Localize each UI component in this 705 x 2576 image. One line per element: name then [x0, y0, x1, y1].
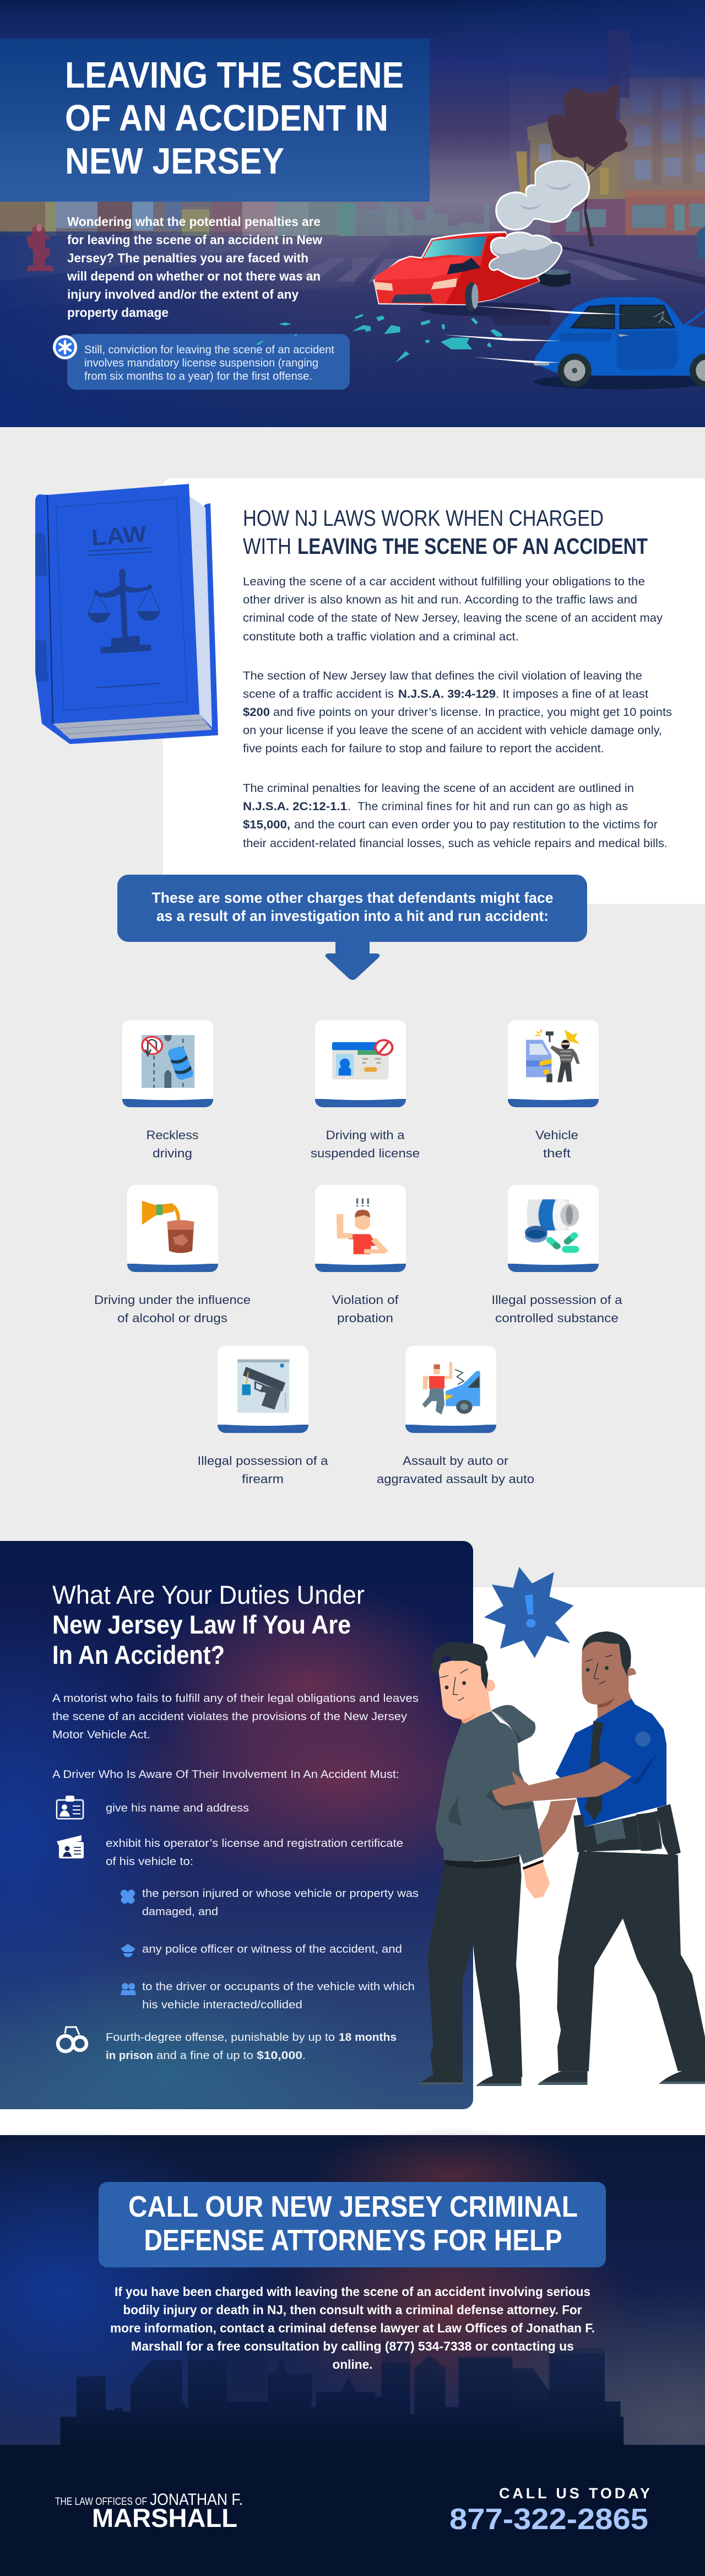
tree	[547, 84, 628, 246]
card: assault by auto	[405, 1346, 496, 1433]
blue car	[533, 297, 705, 390]
yellow building	[527, 120, 631, 199]
law office logo: THE LAW OFFICES OF	[55, 2496, 147, 2508]
street banner	[516, 152, 528, 195]
law paragraph 3: $15,000,	[243, 818, 290, 831]
sub duty: driver or occupants: his vehicle interacted/collided	[142, 1998, 302, 2011]
duties heading: New Jersey Law If You Are	[52, 1610, 351, 1639]
charge cards	[94, 1020, 622, 1486]
duty: exhibit license: exhibit his operator’s license and registration certificate	[106, 1837, 403, 1850]
duties intro: Motor Vehicle Act.	[52, 1728, 150, 1741]
charge labels: theft	[543, 1146, 571, 1160]
white law panel	[163, 478, 705, 904]
card: violation of probation	[315, 1185, 406, 1272]
crash vehicles	[256, 160, 705, 390]
offense penalty text: 18 months	[339, 2031, 397, 2044]
duties heading	[52, 1580, 365, 1669]
sub duty: driver or occupants: to the driver or occupants of the vehicle with which	[142, 1980, 415, 1993]
far skyline	[386, 203, 490, 235]
law paragraph 1	[243, 575, 663, 643]
top fade over buildings	[0, 13, 705, 153]
sidewalk	[550, 235, 705, 272]
icon: thief	[526, 1030, 580, 1082]
icon: pills	[525, 1199, 579, 1253]
charge labels: driving	[153, 1146, 192, 1160]
charge labels: Vehicle	[535, 1128, 578, 1142]
charge labels: Violation of	[332, 1293, 399, 1307]
law paragraph 1: criminal code of the state of New Jersey, leaving the scene of an accident may	[243, 612, 663, 624]
charge labels: controlled substance	[495, 1311, 619, 1325]
charge labels: Illegal possession of a	[491, 1293, 622, 1307]
city skyline	[60, 2325, 623, 2446]
sub duty: person injured	[142, 1887, 419, 1918]
duties subheading: A Driver Who Is Aware Of Their Involvement In An Accident Must:	[52, 1768, 399, 1781]
charge labels: Illegal possession of a	[197, 1454, 328, 1468]
law section heading: WITH	[243, 533, 291, 559]
offense penalty text: Fourth-degree offense, punishable by up to	[106, 2031, 335, 2044]
tall building	[620, 76, 705, 192]
left sidewalk	[0, 236, 346, 281]
charge labels: probation	[337, 1311, 393, 1325]
CTA paragraph: online.	[333, 2357, 372, 2372]
offense penalty text	[106, 2031, 397, 2062]
sub duty: person injured: damaged, and	[142, 1905, 218, 1918]
officer forearm	[492, 1761, 631, 1806]
offense penalty text: in prison	[106, 2049, 153, 2062]
icon: law book	[35, 484, 218, 744]
hero intro text	[67, 214, 322, 320]
officer	[538, 1631, 705, 2085]
hero section	[0, 0, 705, 427]
charge labels	[94, 1128, 622, 1486]
hero title: LEAVING THE SCENE	[65, 55, 404, 96]
CTA banner	[99, 2182, 606, 2267]
illustration: officer and suspect	[418, 1567, 705, 2086]
icon: license	[332, 1040, 392, 1080]
crosswalk stripes	[297, 258, 639, 282]
footer background	[0, 2127, 705, 2563]
charge labels: suspended license	[311, 1146, 420, 1160]
icon: law book: LAW	[90, 521, 148, 551]
law paragraph 2: N.J.S.A. 39:4-129	[398, 688, 496, 700]
charge labels: Driving under the influence	[94, 1293, 251, 1307]
hero intro text: injury involved and/or the extent of any	[67, 287, 299, 301]
bench	[696, 226, 705, 258]
call us today: CALL US TODAY	[499, 2485, 650, 2502]
sub duty: person injured: the person injured or whose vehicle or property was	[142, 1887, 419, 1900]
card: suspended license	[315, 1020, 406, 1107]
red car	[373, 231, 540, 311]
callout panel	[67, 334, 350, 390]
fire hydrant	[26, 224, 54, 271]
phone number: 877-322-2865	[449, 2503, 648, 2536]
alert burst	[484, 1567, 573, 1658]
glass shards	[256, 314, 502, 363]
card: controlled substance	[508, 1185, 599, 1272]
law paragraph 3: N.J.S.A. 2C:12-1.1	[243, 800, 347, 813]
top right sky tint	[529, 0, 705, 78]
law office logo: JONATHAN F.	[150, 2491, 243, 2509]
law paragraph 2: $200	[243, 706, 270, 719]
hero title	[65, 55, 404, 182]
duties dark panel	[0, 1541, 573, 2182]
offense penalty text: and a fine of up to	[156, 2049, 253, 2062]
duties intro: A motorist who fails to fulfill any of their legal obligations and leaves	[52, 1692, 419, 1705]
charge labels: aggravated assault by auto	[377, 1472, 534, 1486]
law paragraph 2: and five points on your driver’s license. In practice, you might get 10 points	[273, 706, 672, 719]
law paragraph 3: . The criminal fines for hit and run can go as high as	[348, 800, 628, 813]
banner: other charges: These are some other charges that defendants might face	[152, 890, 553, 906]
icon: license card	[57, 1835, 84, 1858]
law paragraph 1: constitute both a traffic violation and a criminal act.	[243, 630, 519, 643]
callout text: involves mandatory license suspension (ranging	[84, 357, 318, 369]
law paragraph 1: Leaving the scene of a car accident without fulfilling your obligations to the	[243, 575, 645, 588]
sub duty: driver or occupants	[142, 1980, 415, 2011]
card: driving under influence	[127, 1185, 218, 1272]
duties intro	[52, 1692, 419, 1741]
icon: person and car	[422, 1362, 480, 1414]
law paragraph 3: their accident-related financial losses, such as vehicle repairs and medical bills.	[243, 837, 668, 850]
hero title: OF AN ACCIDENT IN	[65, 98, 388, 139]
hero intro text: for leaving the scene of an accident in New	[67, 233, 322, 247]
callout text: from six months to a year) for the first offense.	[84, 370, 312, 382]
CTA paragraph: If you have been charged with leaving the scene of an accident involving serious	[115, 2284, 590, 2299]
road	[0, 236, 705, 427]
icon: handcuffs	[58, 2027, 86, 2051]
hero title: NEW JERSEY	[65, 141, 284, 182]
offense penalty text: .	[302, 2049, 306, 2062]
law paragraph 2: scene of a traffic accident is	[243, 688, 394, 700]
suspect	[418, 1642, 550, 2086]
grey charges section background	[0, 427, 705, 1587]
duty: give name: give his name and address	[106, 1802, 249, 1814]
storefront	[550, 190, 705, 235]
arrow down	[326, 942, 379, 980]
hero intro text: Jersey? The penalties you are faced with	[67, 251, 308, 265]
car shadow	[420, 303, 555, 316]
law paragraph 2: . It imposes a fine of at least	[496, 688, 648, 700]
CTA paragraph: more information, contact a criminal defense lawyer at Law Offices of Jonathan F.	[110, 2321, 595, 2335]
smoke	[489, 160, 590, 279]
icon: police hat	[121, 1944, 135, 1957]
law paragraph 2: on your license if you leave the scene of an accident with vehicle damage only,	[243, 724, 662, 737]
speed lines	[443, 305, 625, 363]
icon: gun in bag	[237, 1359, 289, 1413]
icon: pouring drink	[142, 1201, 194, 1253]
law paragraph 1: other driver is also known as hit and run. According to the traffic laws and	[243, 594, 637, 606]
charge labels: Reckless	[147, 1128, 198, 1142]
law paragraph 3: and the court can even order you to pay restitution to the victims for	[294, 818, 658, 831]
CTA banner: CALL OUR NEW JERSEY CRIMINAL	[128, 2190, 578, 2223]
city scene on right	[0, 0, 705, 325]
hero intro text: Wondering what the potential penalties are	[67, 214, 321, 229]
icon: asterisk badge	[53, 335, 77, 359]
card: firearm	[218, 1346, 308, 1433]
law office logo: MARSHALL	[92, 2503, 237, 2532]
CTA paragraph: Marshall for a free consultation by calling (877) 534-7338 or contacting us	[131, 2339, 574, 2353]
card: vehicle theft	[508, 1020, 599, 1107]
banner: other charges	[117, 875, 587, 942]
icon: people	[121, 1983, 136, 1995]
icon: ID badge	[57, 1796, 83, 1819]
CTA paragraph	[110, 2284, 595, 2372]
icon: bandage	[119, 1888, 137, 1905]
law office logo	[55, 2491, 243, 2532]
duty: exhibit license	[106, 1837, 403, 1868]
duties intro: the scene of an accident violates the provisions of the New Jersey	[52, 1710, 408, 1723]
hero intro text: will depend on whether or not there was an	[67, 269, 321, 283]
duties heading: What Are Your Duties Under	[52, 1580, 365, 1609]
spare tyre	[539, 270, 571, 287]
hero background	[0, 0, 705, 427]
white duties section background	[0, 1587, 705, 2135]
callout text: Still, conviction for leaving the scene of an accident	[84, 344, 334, 356]
footer ground	[0, 2445, 705, 2576]
law paragraph 2: The section of New Jersey law that defines the civil violation of leaving the	[243, 670, 642, 682]
left street buildings	[0, 202, 412, 236]
charge labels: of alcohol or drugs	[117, 1311, 227, 1325]
law section heading: HOW NJ LAWS WORK WHEN CHARGED	[243, 505, 604, 531]
callout text	[84, 344, 334, 382]
title panel	[0, 39, 430, 202]
law paragraph 2	[243, 670, 672, 755]
CTA banner: DEFENSE ATTORNEYS FOR HELP	[144, 2224, 562, 2257]
charge labels: Assault by auto or	[403, 1454, 508, 1468]
sub duty: police officer: any police officer or witness of the accident, and	[142, 1943, 402, 1955]
hero intro text: property damage	[67, 305, 169, 320]
law paragraph 2: five points each for failure to stop and failure to report the accident.	[243, 742, 604, 755]
charge labels: firearm	[242, 1472, 284, 1486]
law paragraph 3: The criminal penalties for leaving the scene of an accident are outlined in	[243, 782, 634, 795]
offense penalty text: $10,000	[257, 2049, 302, 2062]
law paragraph 3	[243, 782, 668, 850]
traffic light	[608, 30, 630, 98]
law section heading	[243, 505, 648, 559]
fog over buildings	[516, 120, 705, 235]
duty: exhibit license: of his vehicle to:	[106, 1855, 193, 1868]
icon: road and no u-turn	[142, 1035, 194, 1088]
card: reckless driving	[122, 1020, 213, 1107]
icon: angry man	[337, 1198, 388, 1254]
duties heading: In An Accident?	[52, 1640, 225, 1669]
banner: other charges: as a result of an investigation into a hit and run accident:	[156, 908, 549, 924]
CTA paragraph: bodily injury or death in NJ, then consult with a criminal defense attorney. For	[123, 2303, 582, 2317]
charge labels: Driving with a	[326, 1128, 405, 1142]
